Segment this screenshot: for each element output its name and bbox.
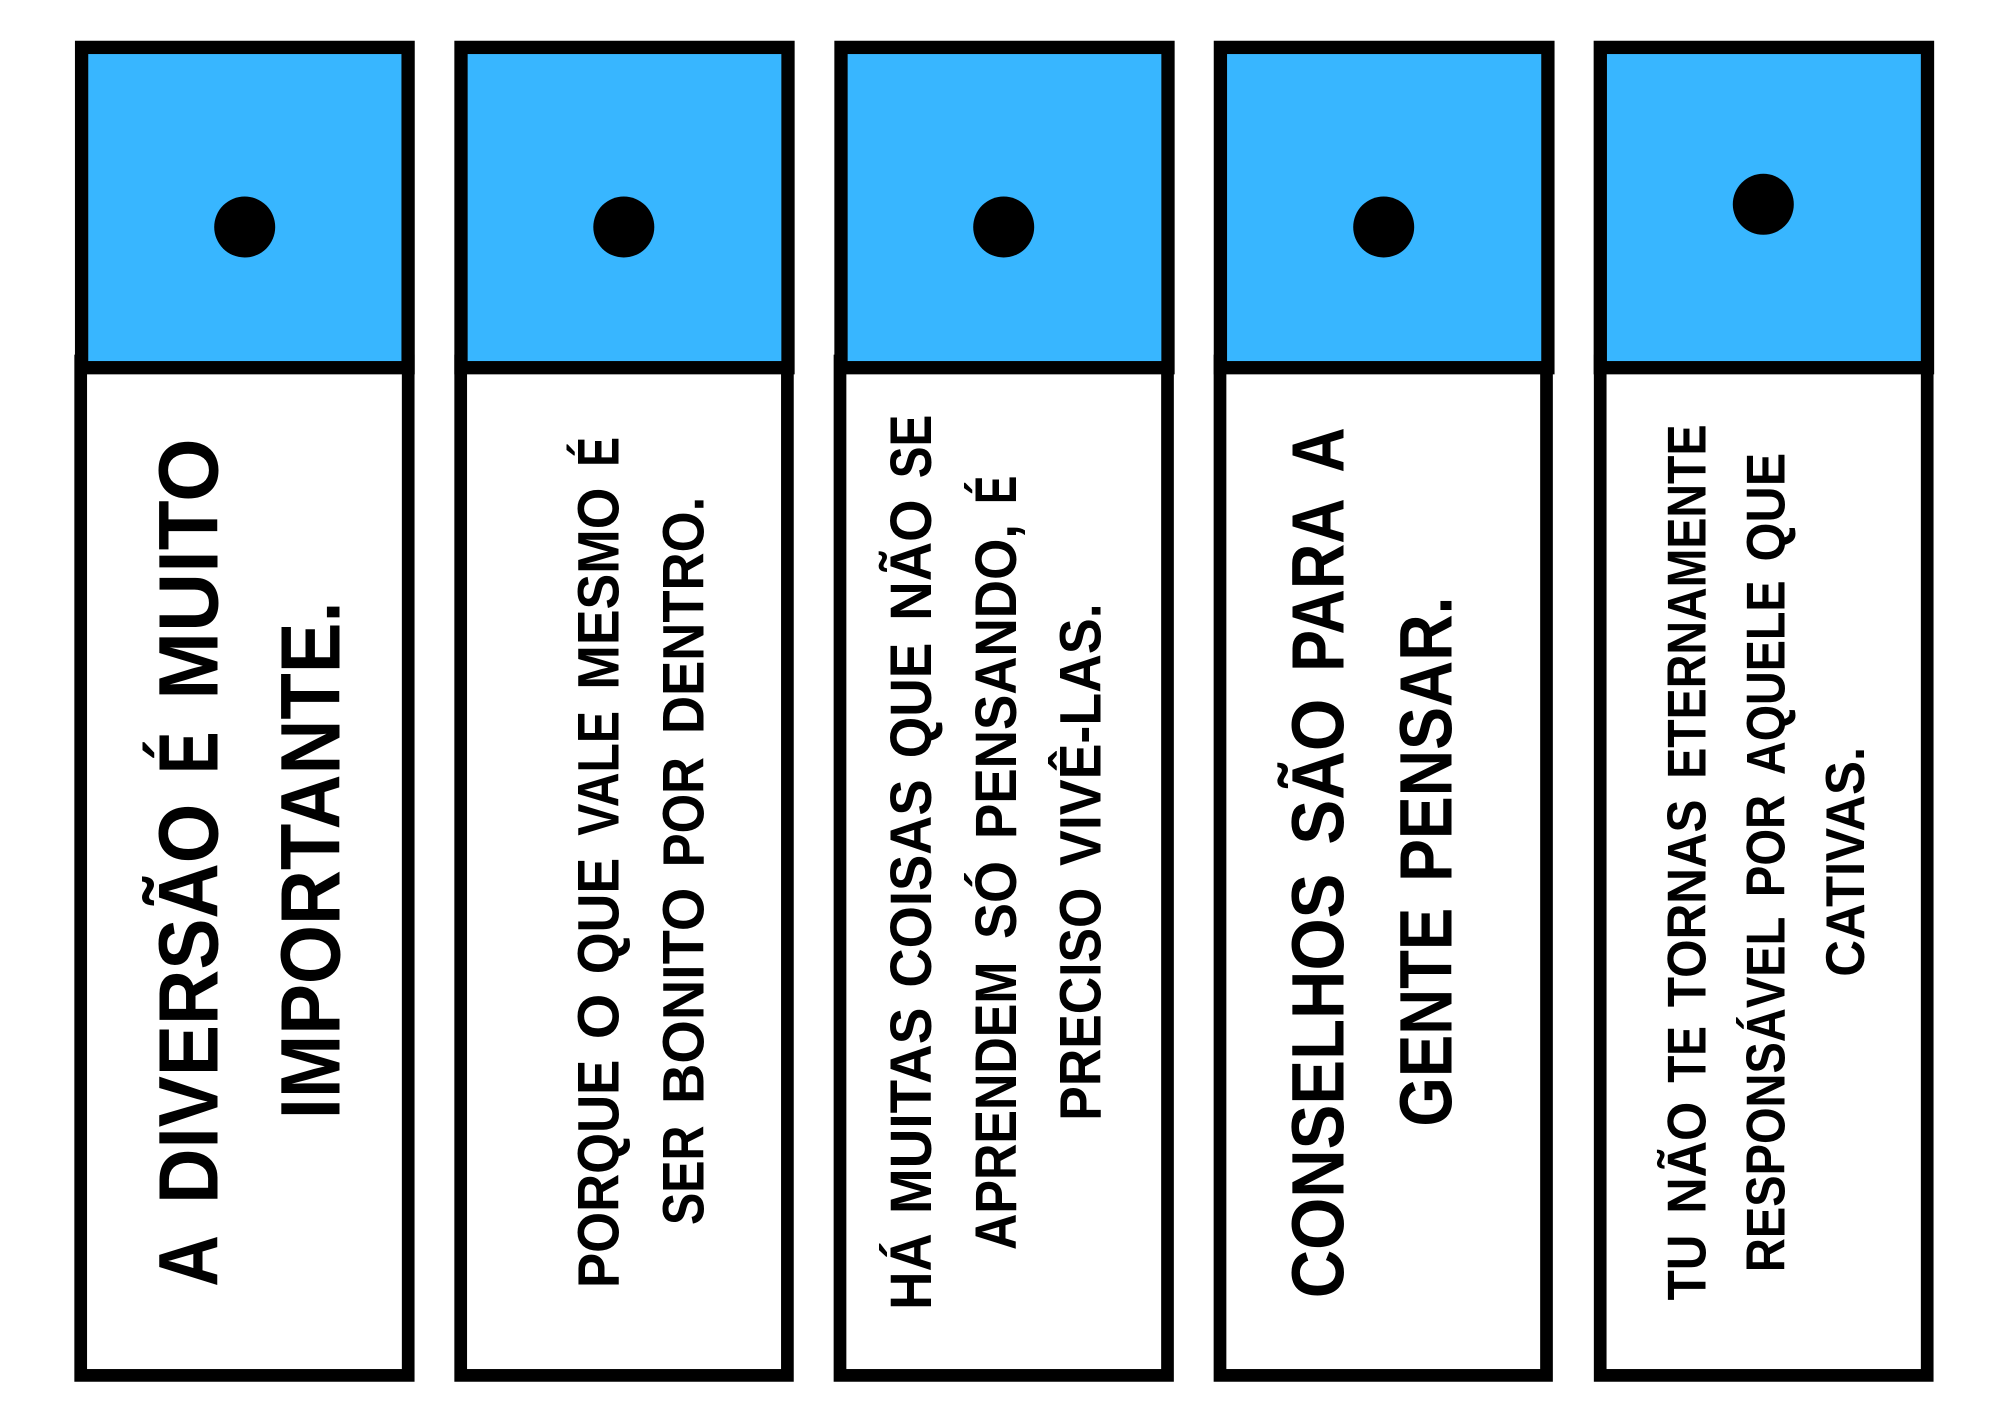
quote 3: VIVÊ-LAS. [1049, 603, 1114, 866]
quote 5: TU [1655, 1235, 1717, 1300]
quote 5: POR [1734, 795, 1796, 897]
quote 4: PARA [1276, 498, 1359, 672]
panel: bookmark 5 [1600, 47, 1928, 1375]
quote 4: PENSAR. [1384, 597, 1467, 882]
blue header 2 [461, 47, 788, 368]
text panel 4 [1220, 361, 1546, 1375]
blue header 1 [82, 47, 408, 368]
quote 3: PENSANDO, [964, 524, 1029, 839]
quote 1: A [142, 1235, 236, 1287]
blue header 5 [1600, 47, 1928, 368]
quote 5: NÃO [1655, 1102, 1717, 1214]
quote 3: COISAS [879, 779, 944, 988]
panel: bookmark 2 [461, 47, 788, 1375]
quote 2: MESMO [566, 488, 631, 690]
icon: hole 1 [214, 196, 275, 258]
quote 5: RESPONSÁVEL [1734, 917, 1796, 1272]
quote 2: POR [651, 757, 716, 867]
quote 3 [879, 415, 1114, 1310]
quote 1: MUITO [142, 438, 236, 700]
quote 1: DIVERSÃO [142, 804, 236, 1204]
quote 2: PORQUE [566, 1060, 631, 1288]
blue header 4 [1220, 47, 1548, 368]
icon: hole 3 [973, 196, 1034, 258]
quote 2: QUE [566, 858, 631, 974]
panel: bookmark 4 [1220, 47, 1548, 1375]
quote 2: SER [651, 1126, 716, 1225]
quote 5: QUE [1734, 453, 1796, 562]
blue header 3 [841, 47, 1168, 368]
quote 3: PRECISO [1049, 888, 1114, 1121]
quote 1 [142, 438, 357, 1287]
quote 5: AQUELE [1734, 580, 1796, 775]
quote 1: IMPORTANTE. [263, 601, 357, 1119]
icon: hole 5 [1733, 174, 1794, 235]
quote 5: CATIVAS. [1814, 747, 1876, 977]
quote 5: TE [1655, 1026, 1717, 1083]
quote 3: SÓ [964, 861, 1029, 939]
text panel 1 [81, 361, 408, 1375]
quote 2: O [566, 994, 631, 1039]
quote 1: É [142, 732, 236, 774]
quote 4: GENTE [1384, 908, 1467, 1127]
icon: hole 2 [593, 196, 654, 258]
quote 5 [1655, 424, 1876, 1300]
panel: bookmark 1 [81, 47, 408, 1375]
quote 3: APRENDEM [964, 962, 1029, 1250]
icon: hole 4 [1353, 196, 1414, 258]
quote 3: QUE [879, 643, 944, 758]
text panel 5 [1600, 361, 1927, 1375]
text panel 2 [461, 361, 787, 1375]
panel: bookmark 3 [840, 47, 1168, 1375]
quote 3: SE [879, 415, 944, 478]
quote 2 [566, 437, 716, 1288]
quote 4 [1276, 427, 1467, 1298]
quote 5: ETERNAMENTE [1655, 424, 1717, 779]
quote 2: VALE [566, 711, 631, 836]
quote 3: HÁ [879, 1233, 944, 1310]
quote 4: SÃO [1276, 699, 1359, 845]
quote 3: NÃO [879, 499, 944, 621]
quote 3: É [964, 476, 1029, 504]
quote 4: CONSELHOS [1276, 874, 1359, 1298]
quote 4: A [1276, 427, 1359, 473]
quote 2: É [566, 437, 631, 467]
text panel 3 [840, 361, 1168, 1375]
quote 5: TORNAS [1655, 799, 1717, 1007]
quote 2: BONITO [651, 888, 716, 1104]
quote 2: DENTRO. [651, 497, 716, 734]
quote 3: MUITAS [879, 1008, 944, 1214]
